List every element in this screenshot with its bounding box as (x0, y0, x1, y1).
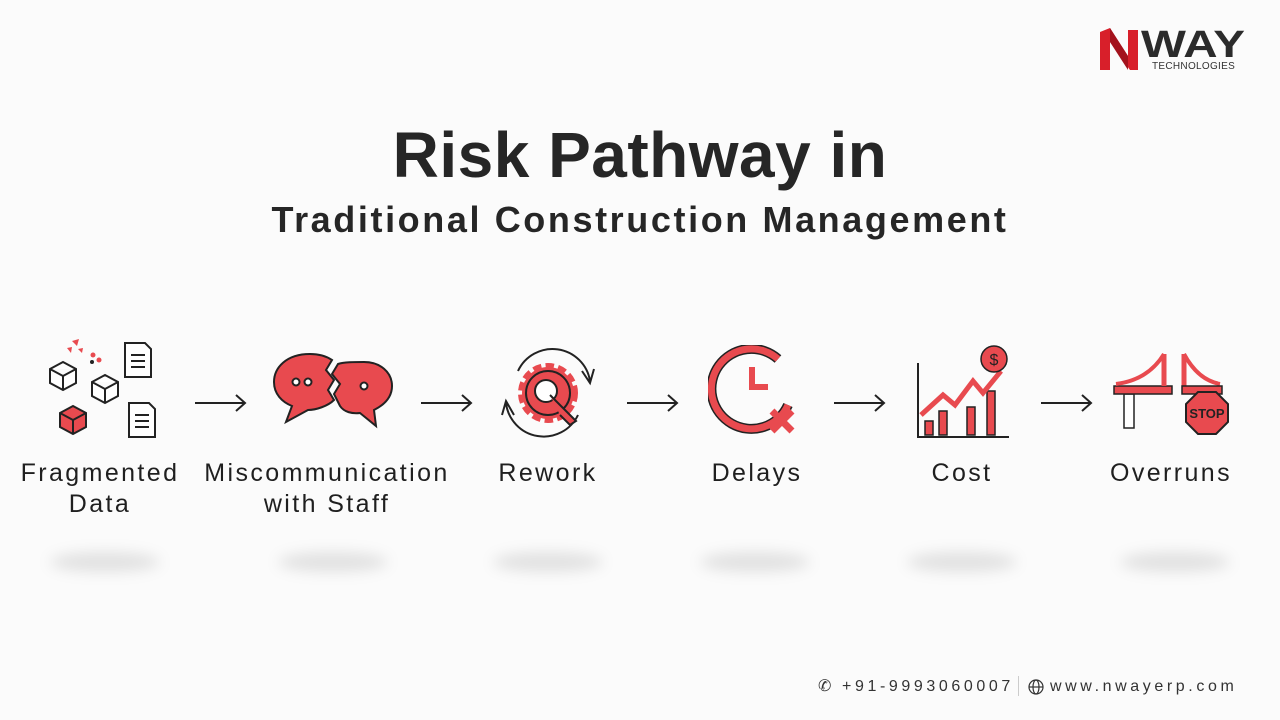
icon: rework (501, 348, 595, 438)
label: Overruns: Overruns (1110, 459, 1232, 487)
website: www.nwayerp.com (1050, 678, 1237, 695)
icon: N mark (1100, 28, 1138, 70)
icon: globe (1028, 679, 1044, 695)
label: Miscommunication with Staff (204, 459, 450, 518)
arrow (627, 394, 678, 412)
icon: cost chart: $ (990, 352, 999, 369)
logo: TECHNOLOGIES (1152, 61, 1235, 72)
label: Delays: Delays (712, 459, 802, 487)
label: Miscommunication with Staff: Miscommunication (204, 459, 450, 487)
label: Rework: Rework (498, 459, 598, 487)
icon: fragmented data (49, 339, 156, 438)
label: Fragmented Data (21, 459, 179, 518)
arrow (834, 394, 886, 412)
icon: overruns bridge with stop: STOP (1189, 406, 1225, 421)
title: Risk Pathway in (393, 119, 887, 191)
label: Fragmented Data: Data (69, 490, 131, 518)
label: Cost: Cost (931, 459, 992, 487)
arrow (1041, 394, 1092, 412)
icon: cost chart (917, 345, 1009, 438)
footer contact (818, 676, 1237, 696)
icon: overruns bridge with stop (1113, 353, 1229, 435)
label: Miscommunication with Staff: with Staff (264, 490, 390, 518)
logo (1100, 26, 1245, 72)
icon: miscommunication (273, 353, 393, 428)
icon: phone: ✆ (818, 678, 831, 695)
phone number: +91-9993060007 (842, 678, 1014, 695)
arrow (195, 394, 246, 412)
arrow (421, 394, 472, 412)
subtitle: Traditional Construction Management (271, 199, 1009, 240)
icon: delays clock (708, 345, 794, 434)
label: Fragmented Data: Fragmented (21, 459, 179, 487)
